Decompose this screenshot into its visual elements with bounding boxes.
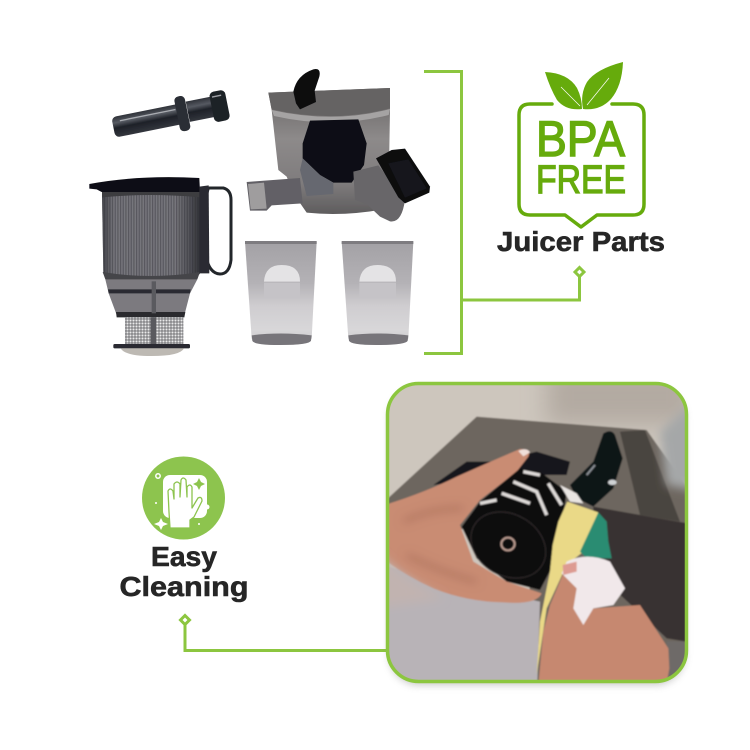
right hand (538, 574, 670, 680)
icon: cleaning hand (142, 456, 225, 540)
upper juicing bowl (247, 69, 430, 221)
sponge (537, 502, 598, 675)
heading: easy cleaning: Cleaning (120, 571, 248, 602)
bracket connector to juicer parts (424, 72, 584, 354)
photo border (388, 384, 686, 682)
badge text FREE: FREE (536, 158, 626, 202)
heading: easy cleaning: Easy (151, 541, 217, 572)
left hand (373, 449, 542, 603)
heading: easy cleaning (120, 541, 248, 602)
icon: leaves (545, 62, 623, 109)
collection cup right (342, 241, 413, 345)
jar (462, 468, 567, 590)
heading: juicer parts: Juicer Parts (497, 226, 665, 257)
collection cup left (245, 241, 317, 345)
spout (570, 431, 623, 507)
filter basket with handle (89, 177, 231, 356)
badge text BPA: BPA (536, 111, 626, 167)
panel: cleaning photo (385, 382, 689, 689)
plunger (110, 87, 231, 145)
BPA free badge (519, 62, 644, 227)
juicer parts product photo (89, 69, 430, 356)
badge outline (519, 104, 644, 227)
connector to cleaning photo (180, 616, 390, 650)
